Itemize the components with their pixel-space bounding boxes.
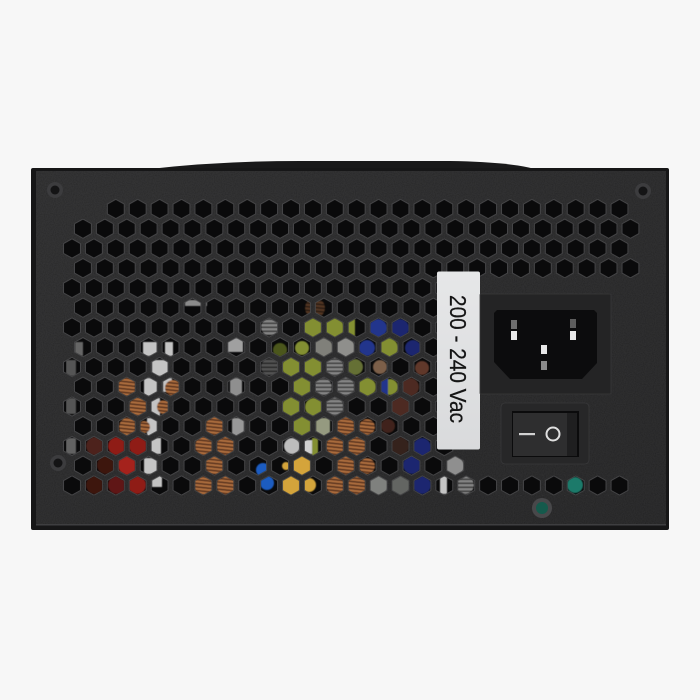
blue cable [256, 319, 431, 494]
white shielding [66, 300, 464, 495]
yellow parts [281, 456, 316, 495]
off mark [519, 433, 535, 435]
screw top left [47, 182, 63, 198]
socket recess [494, 310, 597, 379]
switch bezel [501, 403, 589, 464]
brown wires [373, 360, 429, 455]
on mark [546, 428, 560, 440]
copper coils [118, 298, 375, 495]
top casing edge [150, 161, 535, 169]
switch opening [512, 411, 579, 457]
left pin [511, 320, 517, 340]
rear panel [31, 168, 669, 530]
screw top right [635, 183, 651, 199]
olive green transformer [273, 318, 398, 456]
screw lower left [50, 455, 66, 471]
right pin [570, 319, 576, 340]
hexagonal vent grid [61, 199, 641, 495]
power supply unit [31, 161, 669, 530]
inlet plate [480, 294, 611, 394]
striped grey parts [261, 318, 474, 494]
teal component [567, 477, 583, 493]
power inlet socket [480, 294, 611, 394]
red capacitors [86, 437, 147, 494]
centre pin [541, 345, 547, 370]
internal components seen through the vent [66, 298, 583, 495]
rocker switch [501, 403, 589, 464]
screw bottom [532, 498, 552, 518]
rocker [513, 413, 567, 456]
voltage label [437, 272, 480, 450]
voltage label: 200 - 240 Vac [445, 295, 471, 423]
